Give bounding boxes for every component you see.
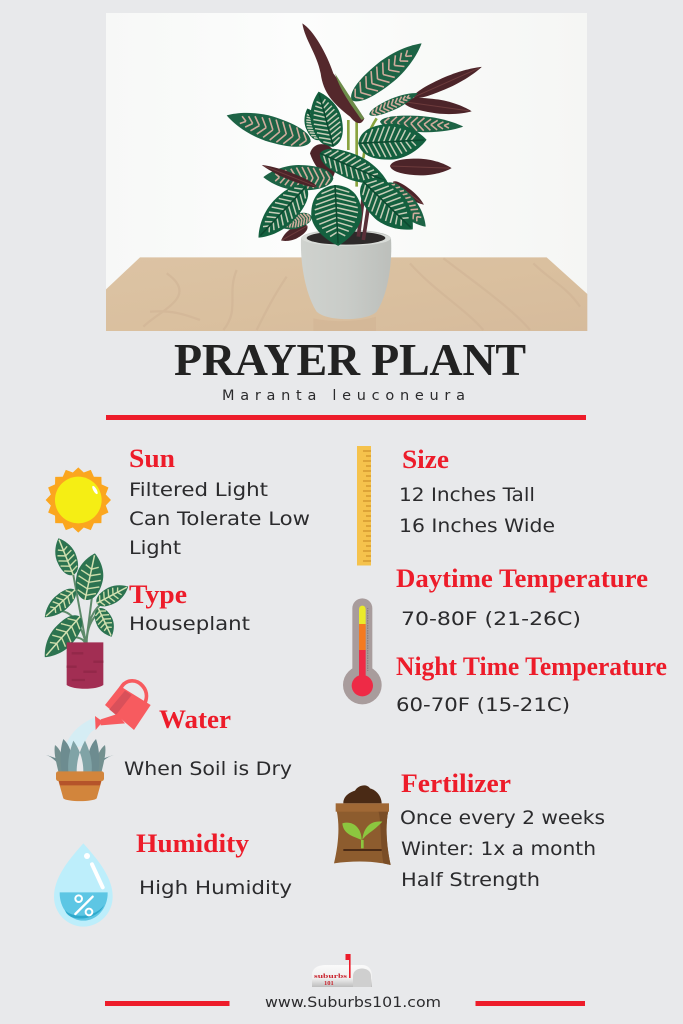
- text: sun needs: [129, 479, 310, 559]
- text: size values: [399, 484, 555, 537]
- text: size values: 12 Inches Tall: [399, 484, 535, 506]
- text: night time temperature value: 60-70F (15-21C): [396, 694, 570, 716]
- text: daytime temperature value: 70-80F (21-26C): [401, 608, 581, 630]
- plant pot: [301, 230, 391, 319]
- heading: humidity: Humidity: [136, 829, 249, 858]
- logo: suburbs 101 mailbox: suburbs: [314, 973, 348, 980]
- text: fertilizer values: Winter: 1x a month: [401, 838, 596, 860]
- heading: water: Water: [159, 705, 231, 734]
- wooden table: [106, 257, 587, 331]
- text: fertilizer values: Half Strength: [401, 869, 540, 891]
- icon: humidity drop: [54, 843, 113, 927]
- heading: daytime temperature: Daytime Temperature: [396, 564, 648, 593]
- icon: ruler: [357, 446, 371, 566]
- heading: night time temperature: Night Time Temperature: [396, 652, 667, 681]
- heading: sun: Sun: [129, 444, 176, 473]
- logo: suburbs 101 mailbox: 101: [324, 980, 334, 987]
- subtitle: botanical name: Maranta leuconeura: [222, 388, 465, 404]
- text: humidity value: High Humidity: [139, 877, 292, 899]
- title: PRAYER PLANT: [174, 334, 526, 385]
- icon: watering can and succulent: [46, 681, 151, 801]
- logo: suburbs 101 mailbox: [312, 954, 372, 987]
- text: fertilizer values: [400, 807, 605, 891]
- footer line left: [105, 1001, 230, 1006]
- heading: fertilizer: Fertilizer: [401, 769, 511, 798]
- heading: type: Type: [129, 580, 187, 609]
- text: sun needs: Filtered Light: [129, 479, 268, 501]
- photo: potted prayer plant on wooden table: [106, 13, 587, 331]
- plant leaves: [223, 23, 484, 247]
- text: fertilizer values: Once every 2 weeks: [400, 807, 605, 829]
- heading: size: Size: [402, 445, 449, 474]
- text: water value: When Soil is Dry: [124, 758, 292, 780]
- icon: sun: [46, 467, 111, 533]
- text: sun needs: Light: [129, 537, 181, 559]
- text: size values: 16 Inches Wide: [399, 515, 555, 537]
- icon: houseplant in red pot: [36, 534, 132, 689]
- footer line right: [476, 1001, 585, 1006]
- text: sun needs: Can Tolerate Low: [129, 508, 310, 530]
- text: type value: Houseplant: [129, 613, 250, 635]
- icon: thermometer: [343, 598, 382, 704]
- icon: fertilizer bag: [334, 785, 391, 865]
- footer website: www.Suburbs101.com: [265, 995, 441, 1011]
